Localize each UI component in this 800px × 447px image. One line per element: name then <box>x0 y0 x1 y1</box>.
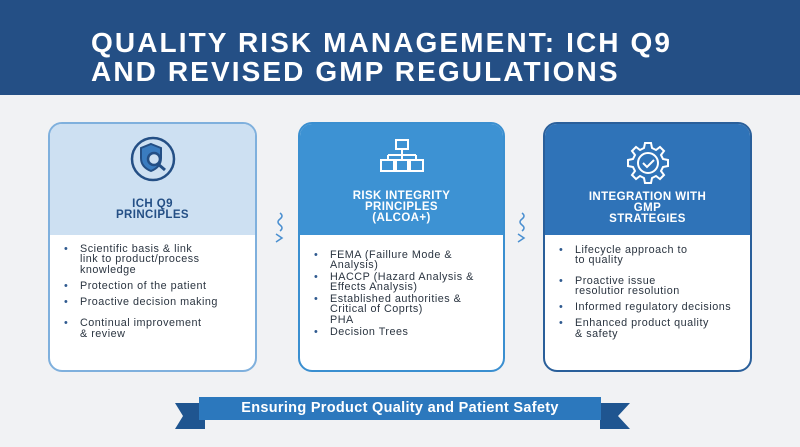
bullet list: Proactive decision making <box>80 296 218 308</box>
panel: integration with GMP <box>543 122 752 372</box>
bullet list: to quality <box>575 254 623 266</box>
panel header: integration: INTEGRATION WITH <box>589 191 706 203</box>
bullet list: Analysis) <box>330 259 378 271</box>
bullet list <box>314 249 474 338</box>
bullet list: FEMA (Faillure Mode & <box>330 249 452 261</box>
bullet list: PHA <box>330 314 354 326</box>
bullet list <box>559 244 731 340</box>
bullet list: resolutior resolution <box>575 285 680 297</box>
ribbon text <box>199 397 601 420</box>
bullet list: Continual improvement <box>80 317 202 329</box>
arrow <box>518 212 526 243</box>
bullet list: & review <box>80 328 125 340</box>
panel: ICH Q9 principles <box>48 122 257 372</box>
bullet list: HACCP (Hazard Analysis & <box>330 271 474 283</box>
bullet list: Effects Analysis) <box>330 281 418 293</box>
panel header: risk integrity: RISK INTEGRITY <box>353 190 450 202</box>
title: AND REVISED GMP REGULATIONS <box>91 56 620 87</box>
panel header: ICH Q9: ICH Q9 <box>132 198 173 210</box>
panel header: risk integrity: PRINCIPLES <box>365 201 438 213</box>
bullet list: Decision Trees <box>330 326 408 338</box>
panel header: integration <box>545 124 750 235</box>
ribbon text: Ensuring Product Quality and Patient Safety <box>241 400 559 416</box>
bullet list <box>64 243 218 340</box>
bullet list: Informed regulatory decisions <box>575 301 731 313</box>
panel header: risk integrity: (ALCOA+) <box>372 212 431 224</box>
icon: hierarchy <box>380 139 424 172</box>
footer ribbon <box>175 397 630 429</box>
bullet list: Protection of the patient <box>80 280 207 292</box>
arrow <box>276 212 284 243</box>
title <box>91 27 672 87</box>
bullet list: knowledge <box>80 264 136 276</box>
bullet list: link to product/process <box>80 253 200 265</box>
bullet list: Established authorities & <box>330 293 461 305</box>
bullet list: Proactive issue <box>575 275 656 287</box>
panel header: integration: GMP <box>634 202 661 214</box>
header <box>0 0 800 95</box>
bullet list: & safety <box>575 328 618 340</box>
icon: shield magnifier <box>130 136 176 182</box>
panel header: ICH Q9: PRINCIPLES <box>116 209 189 221</box>
bullet list: Lifecycle approach to <box>575 244 688 256</box>
bullet list: Scientific basis & link <box>80 243 192 255</box>
title: QUALITY RISK MANAGEMENT: ICH Q9 <box>91 27 672 58</box>
bullet list: Critical of Coprts) <box>330 303 423 315</box>
panel header: ICH Q9 <box>50 124 255 235</box>
panel header: integration: STRATEGIES <box>609 213 686 225</box>
icon: gear check <box>627 142 669 184</box>
panel: risk integrity principles <box>298 122 505 372</box>
panel header: risk integrity <box>300 124 503 235</box>
bullet list: Enhanced product quality <box>575 317 709 329</box>
